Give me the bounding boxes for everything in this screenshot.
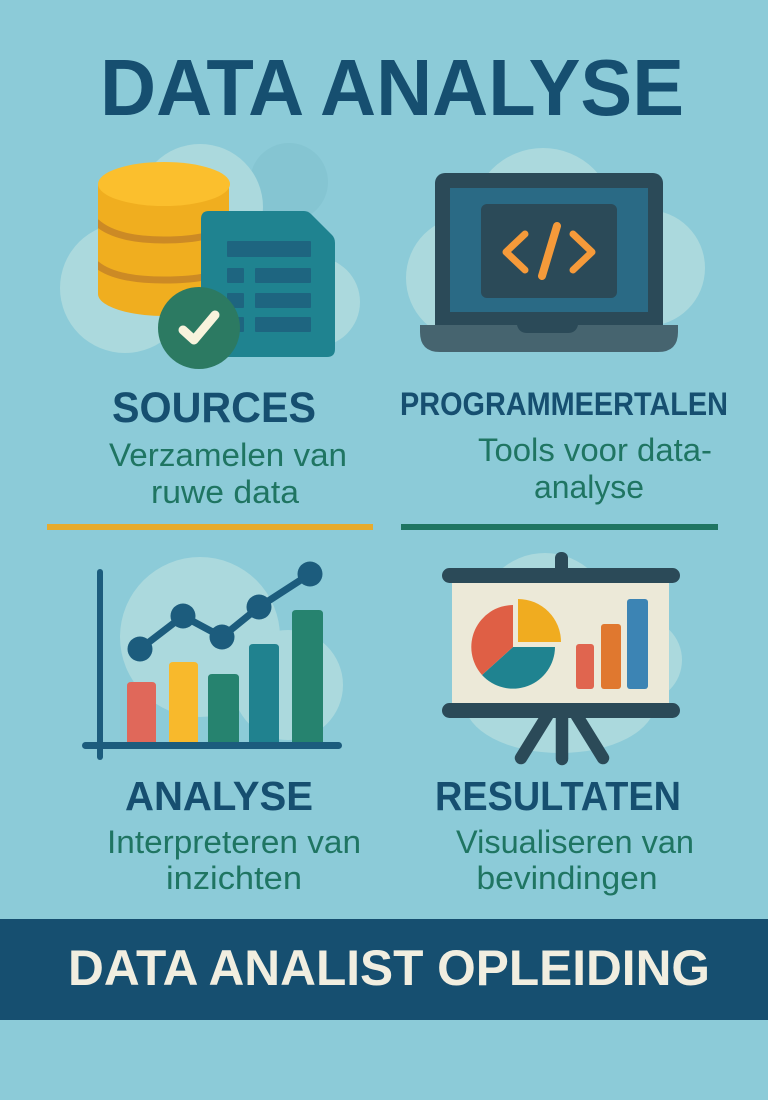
text: sources description: ruwe data [151,474,299,510]
heading: resultaten: RESULTATEN [435,773,681,819]
text: resultaten description: Visualiseren van [456,824,694,860]
icon: bar and line chart [82,557,343,760]
text: resultaten description: bevindingen [476,860,658,896]
text: analyse description: inzichten [166,860,302,896]
text: analyse description [107,824,361,896]
icon: presentation board [442,552,682,759]
divider left [47,524,373,530]
text: programmeertalen description: Tools voor data- [478,432,712,468]
text: programmeertalen description [478,432,712,505]
title: DATA ANALYSE [100,43,684,132]
heading: sources: SOURCES [112,384,316,432]
text: programmeertalen description: analyse [534,469,644,505]
divider right [401,524,718,530]
text: resultaten description [456,824,694,896]
heading: analyse: ANALYSE [125,773,313,819]
banner [0,919,768,1020]
text: sources description [109,437,347,510]
icon: database and document [60,143,360,369]
icon: laptop with code [406,148,705,352]
heading: programmeertalen: PROGRAMMEERTALEN [400,386,728,422]
text: analyse description: Interpreteren van [107,824,361,860]
text: sources description: Verzamelen van [109,437,347,473]
banner: DATA ANALIST OPLEIDING [68,940,710,996]
